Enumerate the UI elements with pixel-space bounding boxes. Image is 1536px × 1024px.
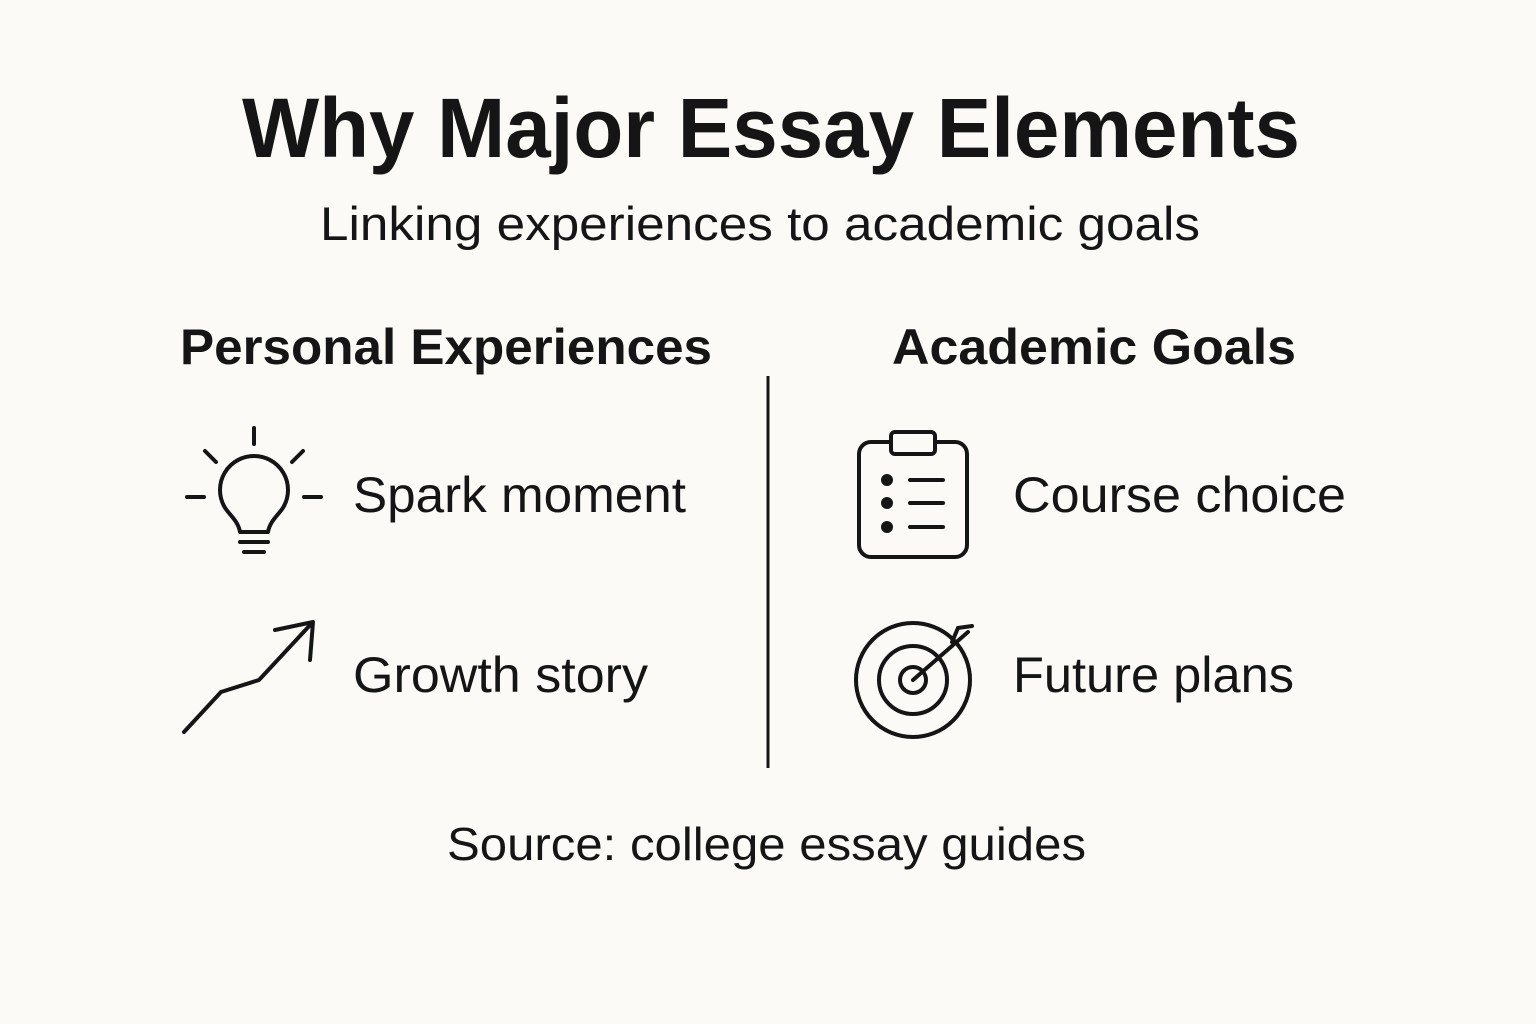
text: growth story: Growth story [353, 647, 648, 703]
subtitle: Linking experiences to academic goals [320, 197, 1200, 250]
heading: academic goals: Academic Goals [892, 319, 1296, 375]
icon: growth arrow [184, 622, 313, 732]
icon: lightbulb [187, 428, 321, 552]
source note: Source: college essay guides [447, 818, 1086, 870]
title: Why Major Essay Elements [242, 81, 1300, 175]
icon: clipboard [859, 432, 967, 557]
text: future plans: Future plans [1013, 647, 1294, 703]
text: spark moment: Spark moment [353, 467, 686, 523]
text: course choice: Course choice [1013, 467, 1346, 523]
heading: personal experiences: Personal Experiences [180, 319, 712, 375]
icon: target [856, 623, 972, 737]
